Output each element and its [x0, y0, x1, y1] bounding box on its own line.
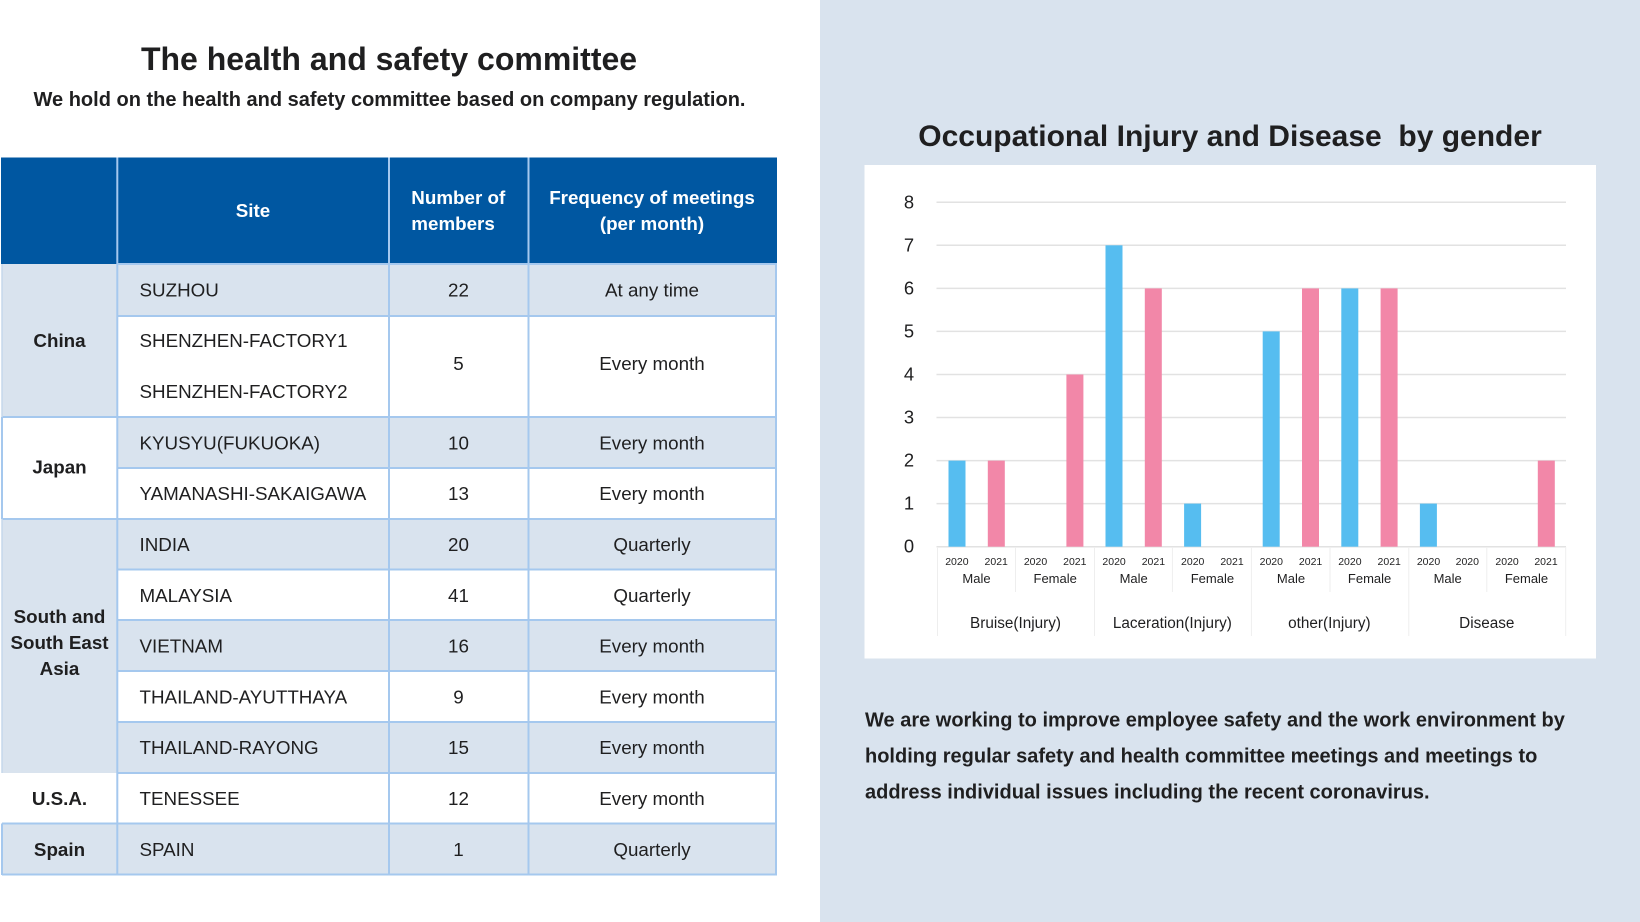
- row: SUZHOU: SUZHOU: [140, 280, 219, 301]
- x axis labels: other(Injury): [1288, 615, 1371, 632]
- x axis labels: 2021: [1063, 556, 1087, 568]
- row: SPAIN: SPAIN: [140, 839, 194, 860]
- row: MALAYSIA: MALAYSIA: [140, 585, 233, 606]
- description text: holding regular safety and health committee meetings and meetings to: [865, 746, 1537, 768]
- region column: Asia: [40, 658, 80, 679]
- x axis labels: [938, 547, 1566, 636]
- row: SPAIN: 1: [453, 839, 464, 860]
- x axis labels: Female: [1348, 571, 1391, 586]
- row: YAMANASHI: Every month: [599, 483, 705, 504]
- x axis labels: 2020: [1024, 556, 1047, 568]
- region column: [2, 264, 117, 875]
- description text: [865, 710, 1566, 803]
- x axis labels: 2020: [1456, 556, 1479, 568]
- row: SUZHOU: At any time: [605, 280, 699, 301]
- row: INDIA: Quarterly: [613, 534, 691, 555]
- x axis labels: Female: [1505, 571, 1548, 586]
- row: MALAYSIA: [140, 585, 691, 606]
- gridlines and y axis: 0: [904, 536, 914, 556]
- row: YAMANASHI: YAMANASHI-SAKAIGAWA: [140, 483, 367, 504]
- subtitle: We hold on the health and safety committee based on company regulation.: [34, 89, 745, 111]
- row: SHENZHEN factories: 5: [453, 353, 464, 374]
- row: SPAIN: [117, 823, 777, 875]
- x axis labels: 2021: [1534, 556, 1558, 568]
- row: THAILAND-AYUTTHAYA: [140, 686, 705, 707]
- chart title: Occupational Injury and Disease by gender: [918, 120, 1542, 153]
- panel: right background: [820, 0, 1640, 922]
- x axis labels: 2021: [1142, 556, 1165, 568]
- table header: Number of: [411, 187, 506, 208]
- row: THAILAND-RAYONG: Every month: [599, 737, 705, 758]
- x axis labels: 2021: [1378, 556, 1401, 568]
- x axis labels: Male: [1434, 571, 1462, 586]
- gridlines and y axis: 5: [904, 320, 914, 342]
- gridlines and y axis: 2: [904, 450, 914, 470]
- row: YAMANASHI: 13: [448, 483, 469, 504]
- gridlines and y axis: 1: [904, 492, 914, 514]
- table header: (per month): [600, 213, 704, 234]
- row: INDIA: [117, 519, 777, 570]
- row: KYUSYU: 10: [448, 432, 469, 453]
- row: VIETNAM: 16: [448, 636, 469, 657]
- table header: Site: [236, 200, 270, 221]
- row: KYUSYU: Every month: [599, 432, 705, 453]
- row: YAMANASHI: [140, 483, 705, 504]
- table header: Frequency of meetings: [549, 187, 755, 208]
- row: THAILAND-AYUTTHAYA: Every month: [599, 686, 705, 707]
- row: MALAYSIA: Quarterly: [613, 585, 691, 606]
- row: SHENZHEN factories: [140, 330, 705, 402]
- table: health and safety committee: [1, 158, 777, 875]
- row: TENESSEE: Every month: [599, 788, 705, 809]
- region column: Japan: [32, 456, 87, 477]
- x axis labels: 2020: [1102, 556, 1126, 568]
- gridlines and y axis: 3: [904, 406, 914, 428]
- table header: members: [411, 213, 495, 234]
- x axis labels: 2020: [1181, 556, 1205, 568]
- region column: Spain: [34, 839, 85, 860]
- row: TENESSEE: [140, 788, 705, 809]
- row: INDIA: 20: [448, 534, 469, 555]
- row: SHENZHEN factories: Every month: [599, 353, 705, 374]
- x axis labels: Laceration(Injury): [1113, 615, 1232, 632]
- row: THAILAND-RAYONG: [117, 722, 777, 773]
- x axis labels: Female: [1034, 571, 1077, 586]
- row: INDIA: INDIA: [140, 534, 190, 555]
- row: THAILAND-AYUTTHAYA: THAILAND-AYUTTHAYA: [140, 686, 348, 707]
- row: KYUSYU: [117, 417, 777, 468]
- row: VIETNAM: Every month: [599, 636, 705, 657]
- row: THAILAND-RAYONG: THAILAND-RAYONG: [140, 737, 319, 758]
- x axis labels: Male: [1120, 571, 1148, 586]
- x axis labels: 2021: [1220, 556, 1244, 568]
- row: THAILAND-AYUTTHAYA: 9: [453, 686, 464, 707]
- x axis labels: 2020: [945, 556, 969, 568]
- row: TENESSEE: TENESSEE: [140, 788, 240, 809]
- x axis labels: Female: [1191, 571, 1234, 586]
- panel: chart: [864, 165, 1596, 658]
- row: VIETNAM: [117, 620, 777, 671]
- region column: U.S.A.: [32, 788, 87, 809]
- region column: South East: [10, 632, 109, 653]
- gridlines and y axis: 7: [904, 234, 914, 256]
- row: SUZHOU: 22: [448, 280, 469, 301]
- gridlines and y axis: [904, 192, 1566, 556]
- gridlines and y axis: 8: [904, 192, 914, 212]
- x axis labels: Male: [962, 571, 991, 586]
- x axis labels: 2021: [985, 556, 1008, 568]
- row: SPAIN: Quarterly: [613, 839, 691, 860]
- row: MALAYSIA: 41: [448, 585, 469, 606]
- description text: address individual issues including the recent coronavirus.: [865, 781, 1430, 803]
- x axis labels: Bruise(Injury): [970, 615, 1061, 632]
- region column: China: [33, 330, 86, 351]
- title: The health and safety committee: [141, 41, 637, 77]
- row: KYUSYU: KYUSYU(FUKUOKA): [140, 432, 320, 453]
- gridlines and y axis: 6: [904, 278, 914, 298]
- x axis labels: Disease: [1459, 615, 1514, 632]
- x axis labels: 2021: [1299, 556, 1322, 568]
- description text: We are working to improve employee safety and the work environment by: [865, 710, 1566, 732]
- row: VIETNAM: VIETNAM: [140, 636, 223, 657]
- row: TENESSEE: 12: [448, 788, 469, 809]
- row: SHENZHEN factories: SHENZHEN-FACTORY1: [140, 330, 348, 351]
- x axis labels: 2020: [1417, 556, 1440, 568]
- table header: [1, 158, 777, 264]
- region column: South and: [14, 606, 105, 627]
- x axis labels: 2020: [1338, 556, 1362, 568]
- x axis labels: 2020: [1495, 556, 1519, 568]
- x axis labels: 2020: [1260, 556, 1283, 568]
- row: THAILAND-RAYONG: 15: [448, 737, 469, 758]
- bars: [948, 245, 1555, 547]
- row: SUZHOU: [117, 264, 777, 316]
- x axis labels: Male: [1277, 571, 1305, 586]
- gridlines and y axis: 4: [904, 364, 914, 384]
- row: SHENZHEN factories: SHENZHEN-FACTORY2: [140, 381, 348, 402]
